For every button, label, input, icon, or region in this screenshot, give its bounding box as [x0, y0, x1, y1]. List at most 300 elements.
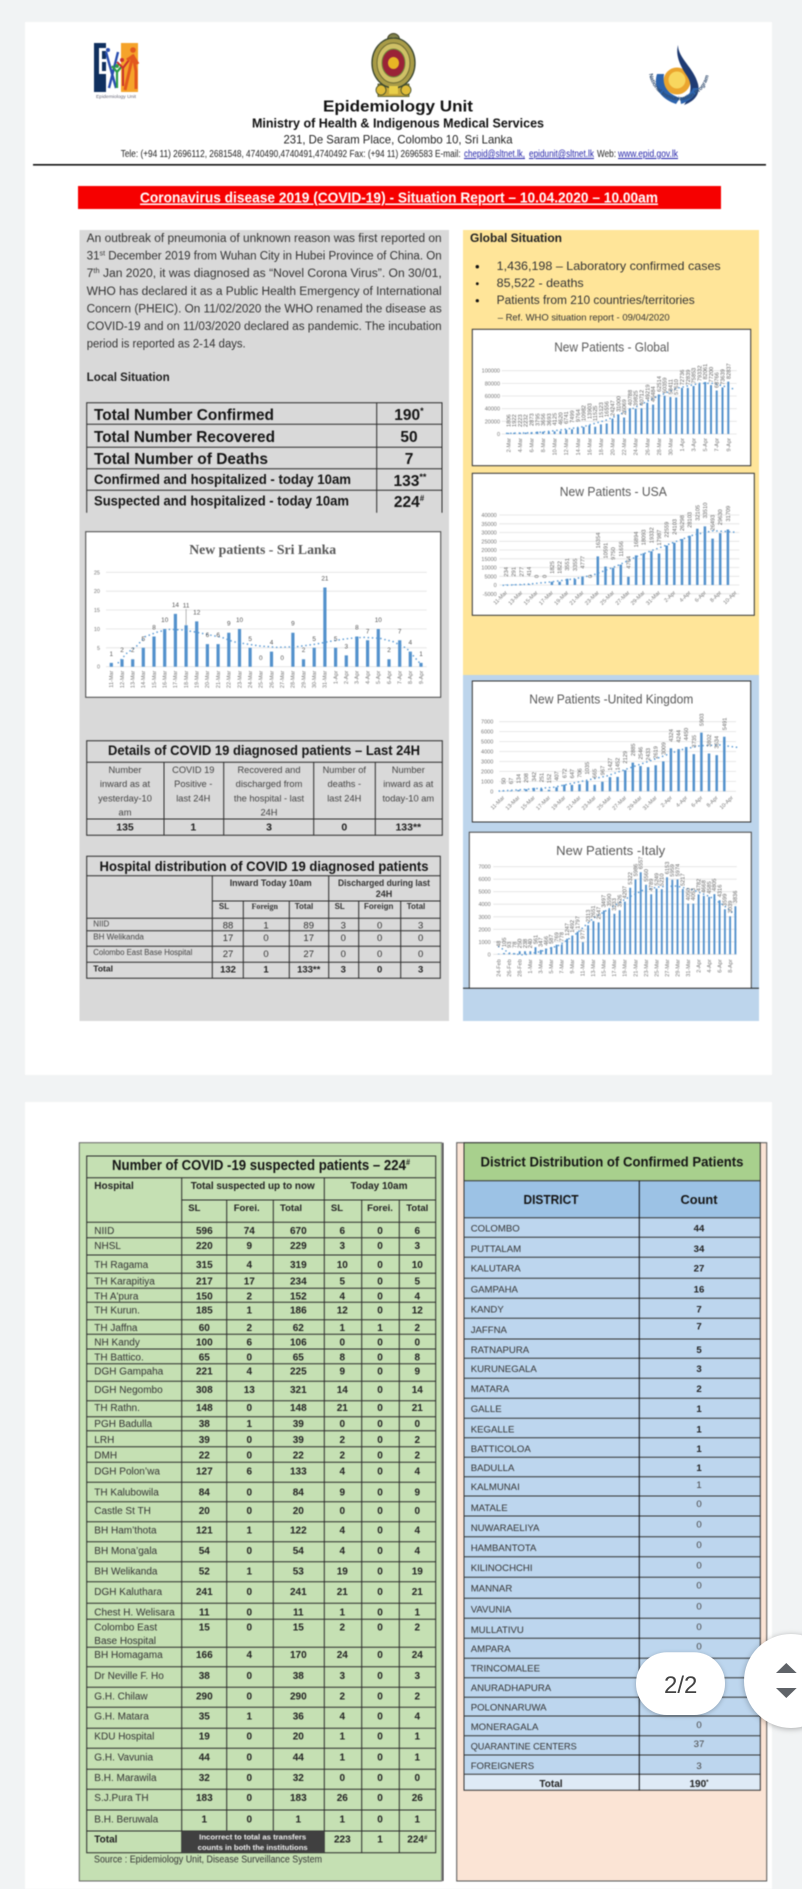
total row note: Incorrect to total as transfers [199, 1832, 306, 1842]
hospital row values: 0 [377, 1567, 383, 1578]
hospital row values: 54 [199, 1546, 210, 1557]
hospital row values: 4 [415, 1546, 421, 1557]
hospital row values: 0 [377, 1488, 383, 1499]
data labels: 10 [375, 617, 382, 624]
chart: New Patients - Global: 40000 [485, 407, 500, 413]
chart title: New Patients -Italy [556, 843, 666, 858]
hospital row values: 186 [290, 1306, 307, 1317]
table: details last 24H: last 24H [176, 794, 210, 804]
data labels: 79332 [697, 365, 703, 381]
table: details last 24H [87, 741, 442, 835]
table: hospital distribution: 0 [377, 920, 382, 931]
data labels: 672 [562, 769, 568, 778]
data labels: 0 [588, 575, 594, 578]
date labels: 6-Mar [530, 438, 536, 452]
data labels: 2619 [654, 746, 660, 759]
hospital row values: 1 [415, 1814, 421, 1825]
data labels: 40712 [640, 390, 646, 406]
data labels: 50 [501, 778, 507, 784]
district names: NUWARAELIYA [471, 1523, 540, 1534]
hospital rows: TH Rathn. [94, 1403, 140, 1414]
data labels: 5 [334, 636, 338, 643]
table heading: # [406, 1158, 410, 1167]
hospital rows: DMH [94, 1451, 117, 1462]
hospital row values: 217 [196, 1277, 213, 1288]
district names: PUTTALAM [471, 1244, 521, 1255]
data labels: 251 [539, 773, 545, 782]
hospital row values: 15 [293, 1623, 304, 1634]
district names: GALLE [471, 1404, 502, 1415]
hospital row values: 1 [247, 1712, 253, 1723]
date labels: 3-Apr [355, 671, 361, 684]
date labels: 25-Mar [599, 590, 616, 607]
icon: National Immunization Programme logo [648, 45, 710, 106]
hospital rows: BH Homagama [94, 1650, 163, 1661]
table: local totals: Total Number of Deaths [94, 451, 268, 468]
table: local totals: 190 [394, 407, 420, 424]
date labels: 1-Apr [333, 671, 339, 684]
hospital row values: 12 [337, 1306, 348, 1317]
district names: BATTICOLOA [471, 1444, 531, 1455]
data labels: 24247 [610, 400, 616, 416]
data labels: 3355 [573, 558, 579, 571]
data labels: 22559 [665, 522, 671, 538]
date labels: 28-Mar [657, 438, 663, 455]
column headers: SL [188, 1203, 201, 1214]
date labels: 4-Mar [518, 438, 524, 452]
intro paragraph: Jan 2020, it was diagnosed as “Novel Corona Virus”. On 30/01, [100, 268, 442, 280]
table: details last 24H: 0 [341, 822, 347, 834]
chart: New Patients - Italy: 2000 [478, 927, 491, 933]
heading: Local Situation: Local Situation [87, 372, 170, 384]
data labels: 1825 [550, 561, 556, 574]
table: hospital distribution: Discharged during last [338, 878, 430, 888]
hospital row values: 39 [293, 1435, 304, 1446]
trend line [499, 745, 737, 791]
chart: New Patients - USA: 10000 [481, 566, 497, 572]
hospital row values: 52 [199, 1567, 210, 1578]
chart: New patients - Sri Lanka [86, 532, 441, 697]
district counts: 37 [694, 1739, 704, 1750]
district names [471, 1224, 577, 1772]
table: hospital distribution: 132 [220, 964, 236, 976]
hospital row values: 0 [415, 1773, 421, 1784]
chart: New Patients - United Kingdom: 5000 [481, 740, 493, 746]
hospital row values: 234 [290, 1277, 307, 1288]
hospital row values: 1 [202, 1814, 208, 1825]
panel: global situation [463, 230, 759, 675]
date labels: 18-Mar [184, 671, 190, 688]
data labels: 26298 [680, 515, 686, 531]
hospital row values: 22 [293, 1451, 304, 1462]
hospital row values: 4 [415, 1291, 421, 1302]
data labels: 1 [110, 651, 114, 658]
column headers: Today 10am [350, 1181, 408, 1192]
date labels: 26-Mar [269, 671, 275, 688]
intro paragraph [87, 233, 442, 351]
data labels: 15123 [599, 402, 605, 418]
hospital row values: 133 [290, 1466, 307, 1477]
table: hospital distribution: 0 [377, 933, 382, 944]
date labels: 7-Apr [715, 438, 721, 451]
heading: ministry: Ministry of Health & Indigenous Medical Services [252, 117, 544, 131]
hospital row values: 0 [377, 1650, 383, 1661]
hospital row values: 0 [247, 1793, 253, 1804]
hospital row values: 4 [340, 1546, 346, 1557]
hospital row values: 4 [340, 1291, 346, 1302]
hospital row values: 38 [199, 1419, 210, 1430]
hospital row values: 0 [377, 1546, 383, 1557]
table: details last 24H: COVID 19 [172, 765, 214, 775]
district counts [689, 1224, 709, 1790]
hospital rows: TH Kurun. [94, 1306, 140, 1317]
table: hospital distribution: 0 [418, 933, 423, 944]
data labels [506, 363, 732, 427]
hospital row values: 6 [340, 1226, 346, 1237]
data labels: 4782 [696, 879, 702, 891]
chart: New Patients - USA: -5000 [483, 592, 497, 598]
data labels: 78 [512, 942, 518, 948]
district names: TRINCOMALEE [471, 1664, 540, 1674]
hospital row values [196, 1226, 428, 1845]
data labels: 93 [507, 942, 513, 948]
date labels: 6-Apr [691, 795, 704, 809]
hospital row values: 1 [340, 1732, 346, 1743]
hospital rows: LRH [94, 1435, 114, 1446]
bars [499, 872, 735, 954]
hospital rows: S.J.Pura TH [94, 1793, 149, 1804]
date labels: 7-Mar [560, 959, 566, 974]
chart: New Patients - United Kingdom: 2000 [481, 769, 493, 775]
data labels: 2433 [646, 748, 652, 761]
data labels: 4585 [707, 881, 713, 894]
hospital row values: 9 [340, 1488, 346, 1499]
date labels [490, 795, 735, 812]
hospital row values: 21 [412, 1587, 423, 1598]
table: local totals: # [420, 494, 425, 503]
hospital row values: 0 [377, 1306, 383, 1317]
data labels: 4450 [684, 728, 690, 740]
table: hospital distribution: SL [219, 902, 229, 911]
date labels: 28-Feb [518, 959, 524, 977]
hospital row values: 0 [377, 1419, 383, 1430]
contact line: www.epid.gov.lk [617, 149, 679, 160]
date labels: 2-Apr [663, 590, 677, 604]
date labels: 21-Mar [216, 671, 222, 688]
hospital row values: 4 [415, 1526, 421, 1537]
total row note: counts in both the institutions [198, 1843, 308, 1852]
hospital row values: 0 [340, 1338, 346, 1349]
hospital row values: 3 [340, 1671, 346, 1682]
table: local totals: 224 [394, 494, 420, 511]
hospital row values: 20 [293, 1506, 304, 1517]
data labels: 3497 [602, 895, 608, 908]
date labels: 27-Mar [612, 795, 628, 812]
data labels: 5217 [681, 873, 687, 886]
district counts: 3 [696, 1761, 702, 1772]
chart: New Patients - United Kingdom: 3000 [481, 760, 493, 766]
date labels [496, 959, 734, 977]
hospital row values: 0 [377, 1352, 383, 1363]
table: local totals: Confirmed and hospitalized - today 10am [94, 472, 351, 487]
hospital row values: 1 [247, 1567, 253, 1578]
page 2 sheet [25, 1102, 772, 1889]
hospital row values: 4 [415, 1466, 421, 1477]
data labels: 1922 [512, 414, 518, 427]
date labels: 29-Mar [301, 671, 307, 688]
chart: New Patients - Italy [463, 832, 759, 988]
data labels: 14 [172, 602, 179, 609]
table: hospital distribution: 1 [263, 920, 269, 931]
hospital rows: TH Battico. [94, 1352, 144, 1363]
data labels [504, 503, 732, 578]
table: hospital distribution: 17 [223, 933, 233, 944]
hospital rows: Castle St TH [94, 1506, 151, 1517]
hospital row values: 0 [377, 1277, 383, 1288]
hospital row values: 0 [377, 1587, 383, 1598]
data labels: 82061 [703, 364, 709, 380]
hospital rows: G.H. Matara [94, 1712, 149, 1723]
hospital row values: 1 [247, 1419, 253, 1430]
hospital row values: 19 [199, 1732, 210, 1743]
data labels: 68766 [715, 372, 721, 388]
date labels: 6-Apr [387, 671, 393, 684]
district names: COLOMBO [471, 1224, 520, 1234]
date labels: 6-Apr [717, 959, 723, 973]
date labels: 8-Apr [706, 795, 720, 809]
contact line: Web: [597, 149, 616, 160]
scroll control button [744, 1634, 802, 1728]
date labels: 31-Mar [645, 590, 662, 607]
data labels: 2873 [530, 413, 536, 426]
table heading: Number of COVID -19 suspected patients – 224 [112, 1158, 435, 1174]
page 1 sheet [25, 22, 772, 1075]
district counts: 0 [696, 1580, 702, 1592]
hospital row values: 127 [196, 1466, 213, 1477]
hospital row values: 39 [293, 1419, 304, 1430]
district counts: 0 [696, 1540, 702, 1551]
date labels: 4-Apr [679, 590, 693, 604]
hospital row values: 38 [293, 1671, 304, 1682]
date labels: 30-Mar [312, 671, 318, 688]
intro paragraph: WHO has declared it as a Public Health Emergency of International [87, 286, 442, 298]
date labels: 17-Mar [535, 795, 552, 812]
district counts: * [706, 1780, 709, 1786]
data labels: 40788 [628, 390, 634, 406]
date labels: 18-Mar [599, 438, 605, 455]
hospital row values: 0 [247, 1773, 253, 1784]
hospital row values: 0 [377, 1753, 383, 1764]
district names: MATARA [471, 1384, 510, 1395]
data labels: 4764 [626, 556, 632, 569]
chart: New Patients - Global: 20000 [485, 419, 500, 425]
bars [503, 733, 724, 791]
icon: down arrow [776, 1688, 797, 1698]
district counts: 190 [689, 1779, 706, 1790]
data labels: 5491 [722, 718, 728, 730]
date labels: 26-Mar [645, 438, 651, 455]
hospital rows: TH Jaffna [94, 1323, 138, 1334]
table: hospital distribution: 0 [263, 933, 269, 944]
hospital row values: 0 [415, 1419, 421, 1430]
hospital row values: 4 [247, 1366, 253, 1377]
table: details last 24H: 1 [190, 822, 196, 834]
data labels: 4789 [649, 879, 655, 891]
district names: VAVUNIA [471, 1604, 512, 1616]
data labels: 62514 [657, 376, 663, 392]
data labels: 3735 [692, 735, 698, 748]
data labels: 75853 [692, 368, 698, 384]
column headers: Forei. [234, 1203, 260, 1214]
data labels: 72736 [680, 370, 686, 385]
date labels: 13-Mar [505, 795, 522, 812]
date labels: 10-Apr [722, 590, 739, 606]
data labels: 0 [280, 655, 284, 662]
hospital rows: NIID [94, 1226, 114, 1237]
hospital row values: 290 [196, 1691, 213, 1702]
date labels: 8-Mar [541, 438, 547, 452]
data labels: 2651 [591, 905, 597, 918]
hospital rows: Dr Neville F. Ho [94, 1671, 164, 1682]
date labels [109, 671, 425, 688]
hospital row values: 170 [290, 1650, 307, 1661]
hospital row values: 2 [415, 1435, 421, 1446]
date labels: 7-Apr [398, 671, 404, 684]
data labels: 11656 [619, 541, 625, 557]
data labels: 4050 [686, 888, 692, 901]
hospital rows: Base Hospital [94, 1636, 156, 1647]
hospital row values: 0 [415, 1506, 421, 1517]
bars [506, 526, 728, 585]
data labels: 9750 [611, 547, 617, 560]
hospital row values: 0 [377, 1526, 383, 1537]
hospital row values: 20 [199, 1506, 210, 1517]
data labels: 1806 [506, 414, 512, 427]
hospital row values: 32 [293, 1773, 304, 1784]
intro paragraph: December 2019 from Wuhan City in Hubei Province of China. On [105, 251, 442, 263]
hospital rows: B.H. Marawila [94, 1773, 157, 1784]
date labels: 5-Apr [703, 438, 709, 451]
data labels: 6 [206, 632, 210, 639]
date labels: 4-Apr [675, 795, 689, 809]
contact line: chepid@sltnet.lk, [464, 149, 525, 160]
table: hospital distribution: 27 [223, 949, 233, 960]
table: local totals: Total Number Confirmed [94, 407, 274, 424]
date labels: 19-Mar [551, 795, 567, 812]
column headers: Total [406, 1203, 428, 1214]
data labels: 16354 [596, 533, 602, 548]
data labels: 2 [131, 647, 135, 654]
data labels: 16894 [634, 532, 640, 547]
table: local totals: ** [419, 472, 427, 482]
data labels: 24103 [672, 519, 678, 535]
contact line: epidunit@sltnet.lk [529, 149, 595, 160]
data labels: 67 [509, 778, 515, 784]
table: hospital distribution: 3 [418, 920, 423, 931]
data labels: 4053 [691, 888, 697, 901]
data labels [496, 857, 739, 948]
data labels: 0 [542, 575, 548, 578]
data labels: 5974 [675, 864, 681, 876]
global situation text [470, 233, 721, 324]
global situation text: Patients from 210 countries/territories [497, 295, 695, 307]
table: local totals: 50 [400, 429, 418, 446]
district counts: 0 [696, 1720, 702, 1731]
district counts: 0 [696, 1499, 702, 1510]
chart: New Patients - Global: 0 [497, 432, 500, 438]
hospital row values: 10 [337, 1260, 348, 1271]
data labels: 77200 [709, 367, 715, 383]
hospital rows: BH Ham’thota [94, 1526, 157, 1537]
data labels: 9 [291, 621, 295, 628]
hospital row values: 35 [199, 1712, 210, 1723]
hospital row values: 9 [340, 1366, 346, 1377]
hospital row values: 0 [377, 1671, 383, 1682]
district names: ANURADHAPURA [471, 1683, 552, 1694]
hospital row values: 2 [247, 1323, 253, 1334]
district names: QUARANTINE CENTERS [471, 1742, 577, 1752]
table: hospital distribution: Foreign [251, 902, 279, 911]
hospital row values: 9 [247, 1241, 253, 1252]
data labels: 4 [409, 640, 413, 647]
date labels: 13-Mar [508, 590, 524, 607]
hospital row values: 13 [244, 1385, 255, 1396]
district names: BADULLA [471, 1463, 515, 1474]
date labels: 2-Mar [506, 438, 512, 452]
data labels: 9 [227, 621, 231, 628]
data labels: 39825 [634, 390, 640, 406]
table: details last 24H: Number of [323, 765, 366, 775]
chart title: New Patients -United Kingdom [529, 691, 693, 706]
data labels: 407 [555, 771, 561, 781]
data labels: 3233 [612, 898, 618, 911]
hospital row values: 185 [196, 1306, 213, 1317]
hospital row values: 74 [244, 1226, 255, 1237]
hospital row values: 1 [415, 1753, 421, 1764]
table: district distribution [464, 1143, 760, 1790]
data labels: 5959 [670, 864, 676, 877]
data labels: 2 [302, 647, 306, 654]
table: hospital distribution: 89 [303, 920, 314, 931]
data labels: 1247 [565, 923, 571, 936]
date labels: 10-Mar [553, 438, 559, 455]
chart title: New Patients - USA [560, 484, 667, 499]
date labels: 11-Mar [109, 671, 115, 688]
hospital row values: 1 [340, 1753, 346, 1764]
date labels: 23-Mar [581, 795, 598, 812]
hospital row values: 321 [290, 1385, 307, 1396]
hospital row values: 2 [340, 1451, 346, 1462]
hospital row values: 24 [412, 1650, 423, 1661]
table: details last 24H: inward as at [383, 779, 434, 789]
hospital row values: 1 [247, 1306, 253, 1317]
date labels: 12-Mar [564, 438, 570, 455]
hospital rows: DGH Kaluthara [94, 1587, 163, 1598]
data labels: 466 [544, 936, 550, 946]
data labels: 10 [161, 617, 169, 624]
data labels: 8 [152, 624, 156, 632]
column headers: SL [331, 1203, 343, 1214]
data labels: 4316 [717, 885, 723, 897]
district counts: 0 [696, 1560, 702, 1572]
hospital row values: 106 [290, 1338, 307, 1349]
data labels: 2129 [623, 751, 629, 764]
data labels: 6741 [564, 411, 570, 424]
column headers [524, 1192, 718, 1207]
chart: New Patients - USA [472, 473, 754, 615]
district counts: 0 [696, 1642, 702, 1652]
hospital rows: KDU Hospital [94, 1732, 154, 1743]
